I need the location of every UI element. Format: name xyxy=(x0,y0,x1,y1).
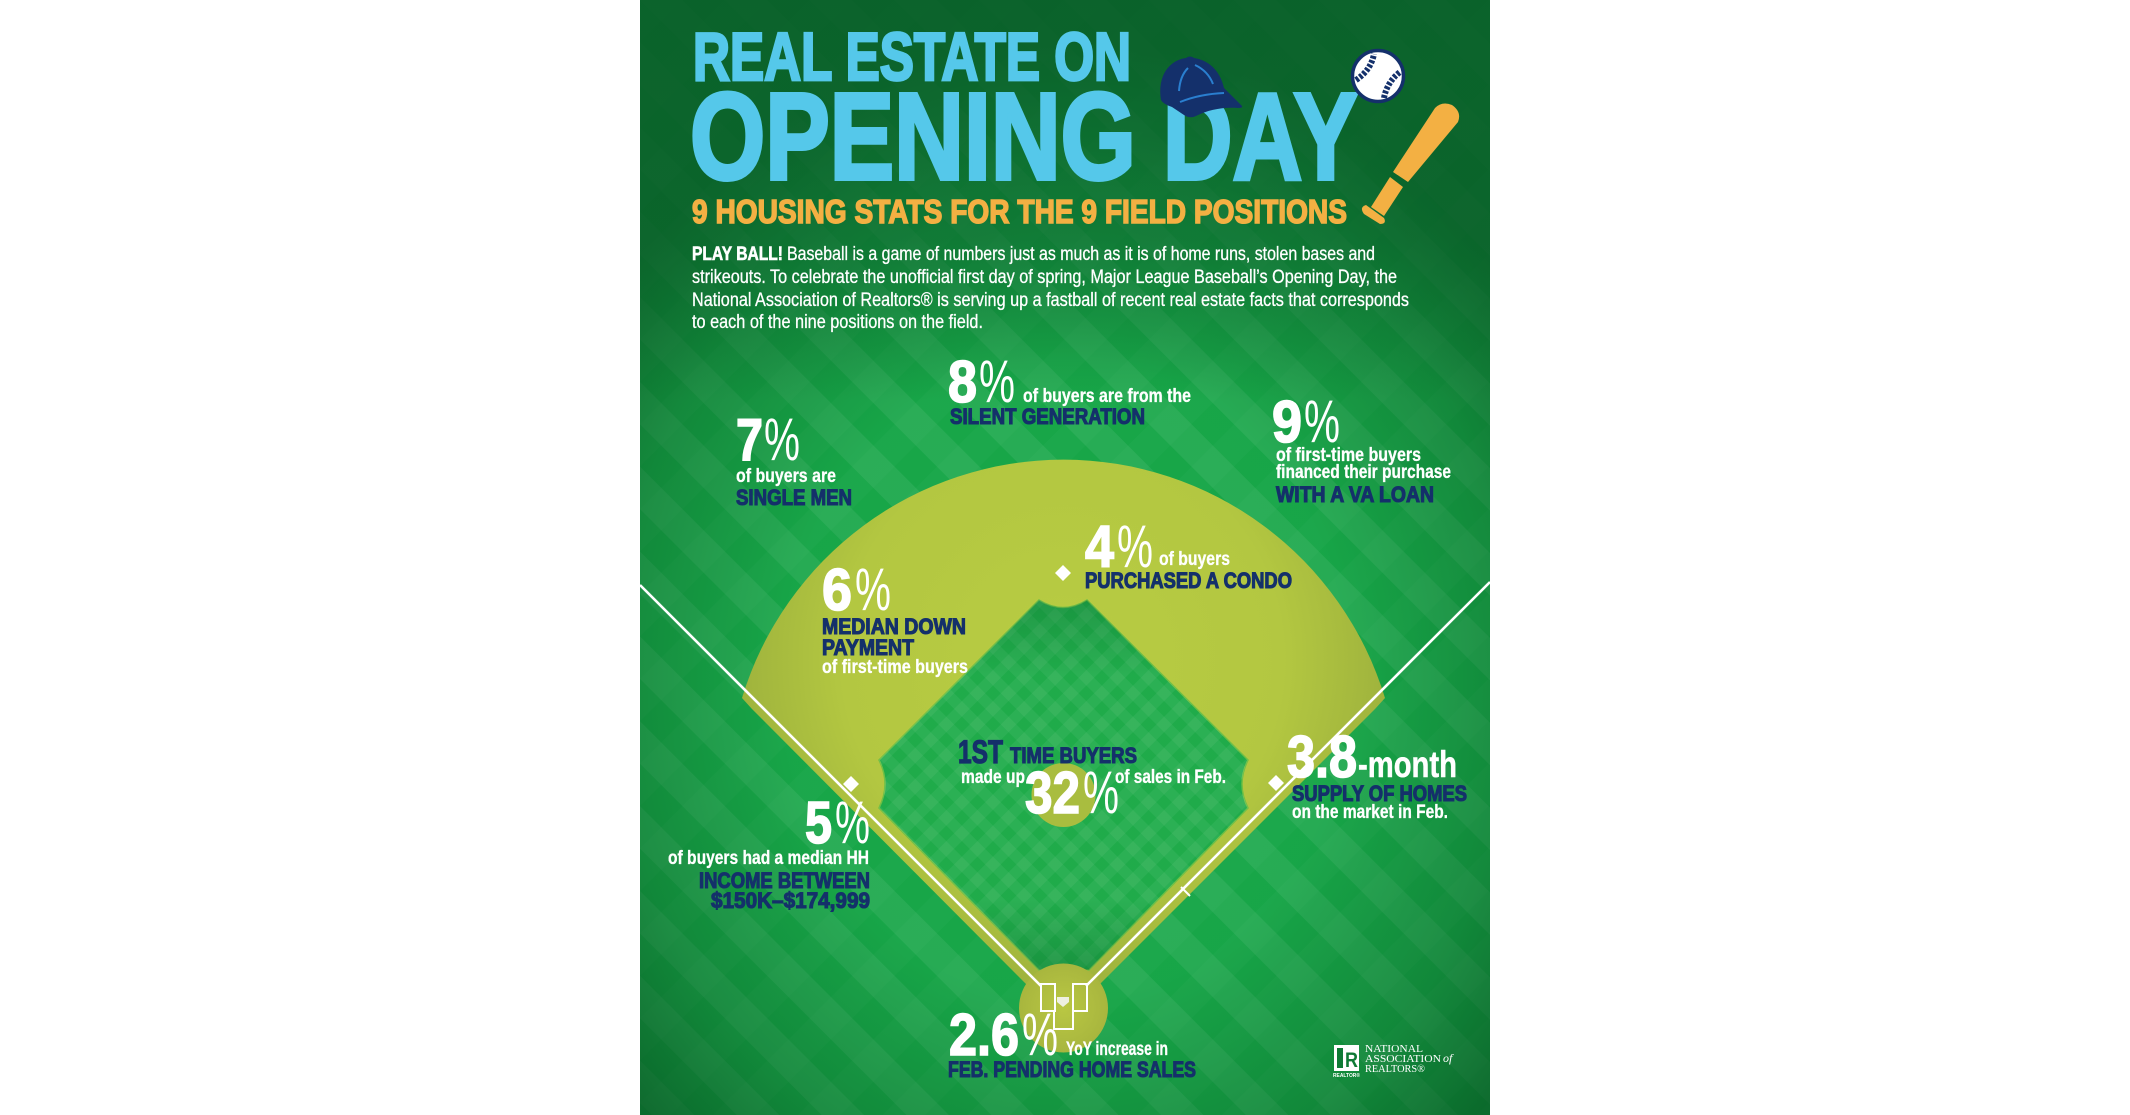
stat: 9% right field xyxy=(1272,388,1451,507)
stat: 6% shortstop: MEDIAN DOWN xyxy=(822,614,966,639)
stat: 2.6% catcher: FEB. PENDING HOME SALES xyxy=(948,1057,1196,1082)
stat: 8% center field: SILENT GENERATION xyxy=(950,404,1145,429)
title: REAL ESTATE ON xyxy=(693,19,1131,95)
icon: bat xyxy=(1362,104,1459,224)
stat: 4% second base: 4 xyxy=(1085,514,1114,580)
stat: 8% center field: % xyxy=(979,348,1015,415)
stat: 6% shortstop: of first-time buyers xyxy=(822,657,968,678)
tick mark on first base line xyxy=(1181,887,1190,896)
stat: 3.8-month first base: SUPPLY OF HOMES xyxy=(1292,781,1467,806)
stat: 3.8-month first base: 3.8 xyxy=(1287,724,1357,790)
stat: 5% third base: 5 xyxy=(805,790,832,856)
stat: 5% third base: $150K–$174,999 xyxy=(711,888,870,913)
stat: 32% pitcher: made up xyxy=(961,767,1025,788)
intro text block: Baseball is a game of numbers just as much as it is of home runs, stolen bases and xyxy=(787,244,1375,265)
logo: National Association of Realtors: REALTORS® xyxy=(1365,1063,1425,1075)
stat: 9% right field: 9 xyxy=(1272,389,1302,455)
stat: 7% left field: SINGLE MEN xyxy=(736,485,852,510)
third base xyxy=(843,776,859,792)
intro text block xyxy=(692,244,1409,333)
stat: 9% right field: of first-time buyers xyxy=(1276,445,1421,466)
title: OPENING DAY xyxy=(690,69,1358,206)
stat: 32% pitcher: % xyxy=(1083,759,1119,826)
logo: National Association of Realtors: R xyxy=(1345,1049,1358,1072)
infield dirt xyxy=(742,460,1385,986)
stat: 7% left field xyxy=(736,406,852,510)
stat: 2.6% catcher: YoY increase in xyxy=(1066,1039,1168,1060)
foul line right xyxy=(1086,582,1490,986)
stat: 9% right field: % xyxy=(1304,388,1340,455)
logo: National Association of Realtors: NATIONAL xyxy=(1365,1043,1423,1055)
stat: 32% pitcher: 32 xyxy=(1025,760,1080,826)
home plate xyxy=(1057,997,1069,1007)
stat: 6% shortstop: 6 xyxy=(822,557,852,623)
stat: 8% center field: 8 xyxy=(948,349,977,415)
stat: 9% right field: financed their purchase xyxy=(1276,462,1451,483)
stat: 32% pitcher: TIME BUYERS xyxy=(1010,743,1137,768)
stat: 4% second base: of buyers xyxy=(1159,549,1230,570)
stat: 5% third base: of buyers had a median HH xyxy=(668,848,869,869)
logo: National Association of Realtors xyxy=(1333,1043,1454,1079)
stat: 5% third base: % xyxy=(835,789,870,856)
intro text block: PLAY BALL! xyxy=(692,244,783,265)
first base xyxy=(1268,775,1284,791)
intro text block: National Association of Realtors® is serving up a fastball of recent real estate facts that corresponds xyxy=(692,290,1409,311)
intro text block: strikeouts. To celebrate the unofficial first day of spring, Major League Baseball’s Opening Day, the xyxy=(692,267,1397,288)
baseball field xyxy=(640,460,1490,1052)
stat: 32% pitcher: 1ST xyxy=(958,734,1003,770)
logo: National Association of Realtors: ASSOCIATION xyxy=(1365,1053,1441,1065)
stat: 6% shortstop: % xyxy=(855,556,891,623)
stat: 3.8-month first base xyxy=(1287,724,1467,823)
title xyxy=(690,19,1358,206)
stat: 9% right field: WITH A VA LOAN xyxy=(1276,482,1434,507)
stat: 7% left field: 7 xyxy=(736,407,763,473)
stat: 2.6% catcher: 2.6 xyxy=(949,1002,1019,1068)
intro text block: to each of the nine positions on the field. xyxy=(692,312,983,333)
logo: National Association of Realtors: of xyxy=(1443,1051,1454,1065)
stat: 5% third base xyxy=(668,789,870,913)
icon: cap xyxy=(1160,56,1242,117)
pitcher's mound xyxy=(1032,763,1096,827)
foul line left xyxy=(640,585,1041,986)
stat: 6% shortstop: PAYMENT xyxy=(822,635,914,660)
stat: 6% shortstop xyxy=(822,556,968,678)
icon: baseball xyxy=(1352,50,1404,102)
stat: 32% pitcher: of sales in Feb. xyxy=(1115,767,1226,788)
stat: 5% third base: INCOME BETWEEN xyxy=(699,868,870,893)
stat: 7% left field: of buyers are xyxy=(736,466,836,487)
stat: 4% second base xyxy=(1085,513,1292,593)
home plate circle xyxy=(1019,964,1108,1052)
stat: 32% pitcher xyxy=(958,734,1226,826)
stat: 2.6% catcher: % xyxy=(1022,1001,1058,1068)
background: green striped panel xyxy=(640,0,1490,1115)
stat: 4% second base: PURCHASED A CONDO xyxy=(1085,568,1292,593)
stat: 3.8-month first base: -month xyxy=(1358,744,1457,785)
second base xyxy=(1055,565,1071,581)
stat: 8% center field: of buyers are from the xyxy=(1023,386,1191,407)
batter's boxes and catcher's box xyxy=(1041,984,1087,1029)
stat: 8% center field xyxy=(948,348,1191,429)
stat: 4% second base: % xyxy=(1117,513,1153,580)
stat: 7% left field: % xyxy=(764,406,800,473)
infield grass diamond xyxy=(879,600,1248,970)
stat: 2.6% catcher xyxy=(948,1001,1196,1082)
stat: 3.8-month first base: on the market in Feb. xyxy=(1292,802,1448,823)
subtitle: 9 HOUSING STATS FOR THE 9 FIELD POSITIONS xyxy=(692,193,1347,230)
logo: National Association of Realtors: REALTOR® xyxy=(1333,1072,1360,1079)
